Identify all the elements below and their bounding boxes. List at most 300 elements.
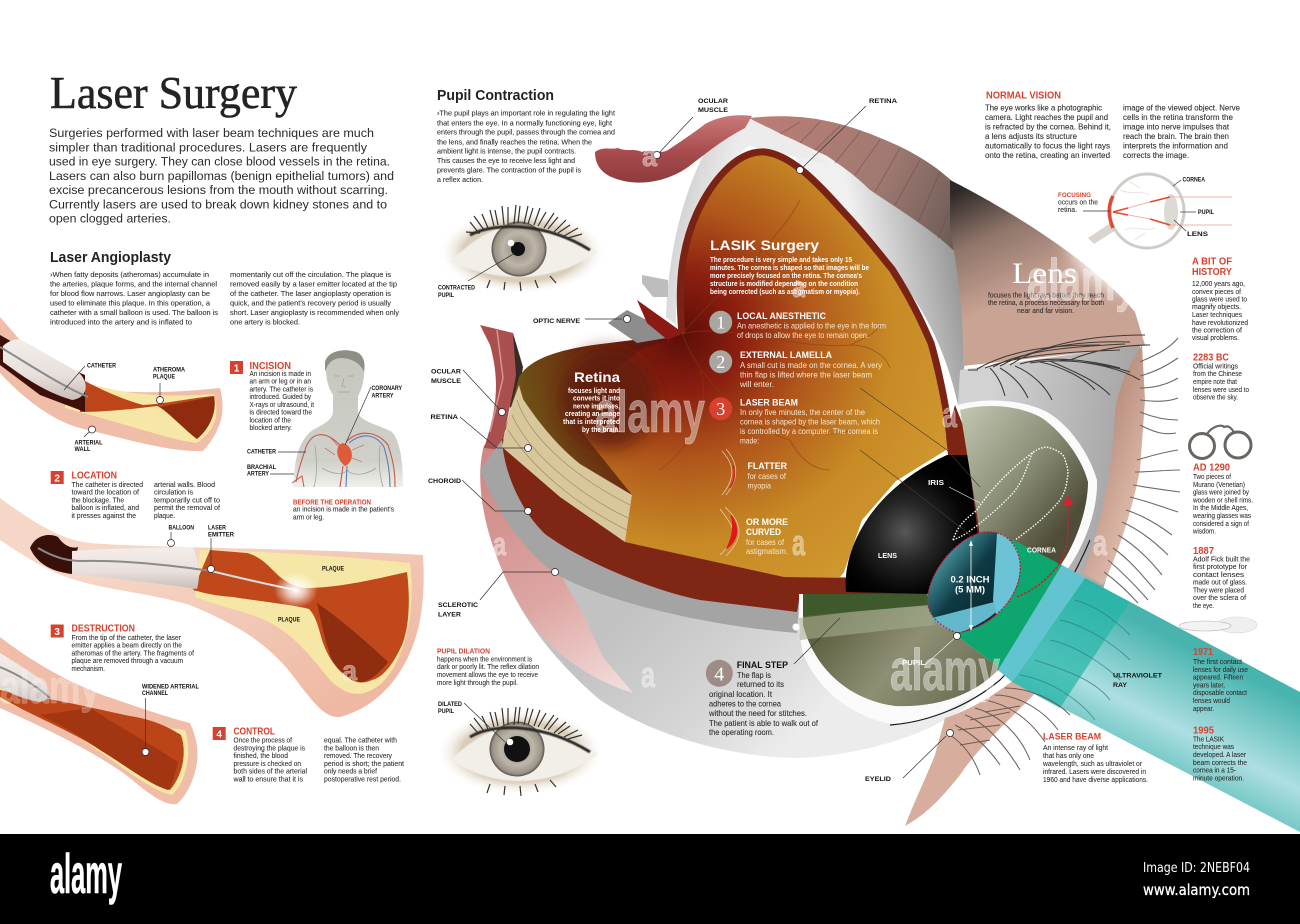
eye: upper grey shell (770, 119, 965, 405)
intro paragraph: Lasers can also burn papillomas (benign epithelial tumors) and (49, 169, 394, 183)
entry: 1995 (1193, 726, 1247, 782)
text: LASIK surgery: more precisely focused on the retina. The cornea's (710, 271, 862, 280)
stock-photo watermarks: a (792, 522, 806, 563)
eye: retina floor (505, 334, 860, 577)
labels around main eye: IRIS (928, 480, 944, 487)
label: dilated pupil: PUPIL (438, 708, 454, 715)
labels around main eye: RETINA (869, 98, 897, 105)
entry: 1995: 1995 (1193, 726, 1214, 736)
text: retina: focuses light and (568, 388, 620, 395)
text: pupil contraction: the lens, and finally reaches the retina. When the (437, 137, 592, 146)
step 1: incision: 1 (234, 364, 240, 374)
stock-photo watermarks: a (792, 271, 805, 304)
entry: 2283 BC (1193, 352, 1249, 402)
text: lens: the retina, a process necessary for both (988, 298, 1104, 307)
stock-photo watermarks: alamy (595, 380, 705, 445)
entry: 1995: technique was (1193, 742, 1234, 751)
text: normal vision: The eye works like a photographic (985, 104, 1102, 112)
footer image id: Image ID: 2NEBF04 (1143, 860, 1250, 876)
intro paragraph: excise precancerous lesions from the mouth without scarring. (49, 183, 388, 197)
entry: 1887: contact lenses (1193, 570, 1244, 579)
text: laser beam definition (1042, 731, 1148, 784)
entry: 1995: The LASIK (1193, 734, 1224, 744)
text: pupil dilation: more light through the pupil. (437, 678, 518, 687)
text: LASIK surgery: LASIK Surgery (710, 237, 819, 253)
label: dilated pupil (438, 701, 505, 742)
text: LASIK surgery (710, 237, 869, 296)
text: pupil contraction: a reflex action. (437, 175, 483, 184)
step 4: control: CONTROL (234, 726, 275, 737)
text: retina: nerve impulses, (573, 403, 620, 410)
step 3: destruction: plaque are removed through a vacuum (72, 656, 183, 665)
text: pupil dilation: PUPIL DILATION (437, 648, 490, 656)
step 3: laser beam (709, 397, 880, 445)
step 3: destruction: emitter applies a beam directly on the (72, 641, 182, 650)
footer bar: alamy (50, 842, 122, 905)
eye: iris disc and cornea ring (799, 401, 1097, 724)
entry: 1887: over the sclera of (1193, 593, 1247, 602)
step 2: location: plaque. (154, 511, 175, 520)
entry: intro: HISTORY (1192, 267, 1232, 278)
text: pupil contraction (437, 88, 616, 184)
eye: gold retina wall (580, 152, 951, 577)
entry: 1971: years later, (1193, 680, 1225, 689)
eye: lens (846, 455, 978, 594)
text: laser beam definition: infrared. Lasers were discovered in (1043, 767, 1146, 776)
text: angioplasty description: quick, and the patient's recovery period is usually (230, 298, 391, 308)
entry: 1971: lenses for daily use (1193, 665, 1248, 674)
timeline: a bit of history (1179, 256, 1257, 782)
entry: intro: Laser techniques (1192, 310, 1242, 319)
step 4: control: removed. The recovery (324, 751, 392, 760)
label: cornea: CORNEA (1182, 176, 1205, 183)
label: catheter: CATHETER (87, 362, 116, 370)
eye: retina inner rim (680, 152, 951, 447)
entry: 2283 BC: from the Chinese (1193, 369, 1242, 378)
label: arterial wall (74, 426, 102, 453)
step 3: destruction: DESTRUCTION (72, 624, 135, 635)
text: or more curved: astigmatism. (746, 546, 788, 556)
artery illustration 2: laser emitter on plaque (0, 498, 424, 717)
step 4: control: only needs a brief (324, 767, 378, 776)
entry: 1887 (1193, 546, 1250, 610)
label: arterial wall: WALL (74, 446, 90, 453)
step 1: local anesthetic: 1 (716, 312, 725, 332)
eye: pupil cornea section (927, 532, 1020, 633)
step 2: location: permit the removal of (154, 503, 221, 512)
entry: intro: magnify objects. (1192, 302, 1241, 311)
eye: green cornea zone (957, 540, 1062, 668)
text: angioplasty description: momentarily cut off the circulation. The plaque is (230, 270, 391, 279)
labels around main eye: SCLEROTIC (438, 602, 478, 609)
eye: tan retina layer (502, 385, 632, 542)
text: pupil contraction: prevents glare. The contraction of the pupil is (437, 166, 581, 175)
label: focusing: retina. (1058, 205, 1077, 214)
step 4: control: both sides of the arterial (234, 767, 307, 776)
eye: upper lid lashes (968, 335, 1150, 400)
stock-photo watermarks: alamy (0, 661, 100, 713)
label: laser emitter: EMITTER (208, 531, 234, 538)
step 3: laser beam: In only five minutes, the center of the (740, 407, 865, 417)
labels around main eye: PUPIL (902, 660, 926, 667)
labels for torso: ARTERY (372, 392, 394, 399)
step 4: control: 4 (216, 730, 222, 740)
step 4: final step: FINAL STEP (737, 660, 789, 671)
entry: 1971 (1193, 647, 1248, 713)
labels for torso: BRACHIAL (247, 464, 276, 471)
eye: upper muscle band (749, 116, 1005, 250)
entry: intro: convex pieces of (1192, 287, 1242, 296)
eye: lower ocular muscle fade (480, 445, 633, 693)
eye: iris band (946, 405, 980, 565)
step 2: location: it presses against the (72, 511, 136, 520)
footer url: www.alamy.com (1143, 881, 1250, 899)
text: pupil contraction: This causes the eye to receive less light and (437, 156, 575, 165)
entry: 2283 BC: empire note that (1193, 377, 1238, 386)
text: flatter (748, 461, 787, 490)
intro paragraph: Currently lasers are used to break down kidney stones and to (49, 197, 387, 211)
step 4: control: destroying the plaque is (234, 743, 305, 752)
entry: 2283 BC: 2283 BC (1193, 352, 1229, 364)
eye: lower sphere (490, 480, 1000, 758)
step 2: location: 2 (54, 474, 60, 484)
text: laser beam definition: 1960 and have diverse applications. (1043, 775, 1148, 784)
entry: AD 1290: glass were joined by (1193, 488, 1249, 496)
text: angioplasty description: ›When fatty deposits (atheromas) accumulate in (50, 270, 209, 279)
labels around main eye: OPTIC NERVE (533, 318, 581, 325)
step 3: laser beam: made: (740, 435, 759, 445)
text: lens (988, 257, 1104, 315)
step 3: destruction (51, 624, 195, 673)
labels for torso: CATHETER (247, 449, 276, 456)
heading: Laser Angioplasty: Laser Angioplasty (50, 250, 171, 266)
label: atheroma plaque (153, 366, 185, 404)
text: pupil contraction: Pupil Contraction (437, 88, 554, 104)
step 3: destruction: atheromas of the artery. The fragments of (72, 648, 195, 658)
step 1: incision (230, 361, 315, 432)
text: angioplasty description: used to eliminate this plaque. In this operation, a (50, 298, 211, 308)
intro paragraph: simpler than traditional procedures. Lasers are frequently (49, 140, 368, 154)
step 4: control: equal. The catheter with (324, 736, 397, 744)
labels around main eye: RETINA (430, 414, 458, 421)
entry: 1971: appear. (1193, 704, 1214, 713)
step 1: incision: artery. The catheter is (250, 384, 313, 393)
text: flatter: for cases of (748, 471, 787, 481)
label: arterial wall: ARTERIAL (74, 439, 102, 446)
entry: AD 1290: AD 1290 (1193, 462, 1230, 474)
step 2: location: temporarily cut off to (154, 495, 220, 504)
labels for torso: ARTERY (247, 471, 269, 478)
step 2: external lamella: A small cut is made on the cornea. A very (740, 360, 883, 370)
text: lens: Lens (1012, 257, 1077, 290)
artery illustration 3: widened channel (0, 637, 199, 804)
text: normal vision: NORMAL VISION (986, 90, 1061, 101)
step 4: control: wall to ensure that it is (233, 775, 303, 784)
step 3: destruction: From the tip of the catheter, the laser (72, 633, 181, 642)
step 1: local anesthetic: LOCAL ANESTHETIC (737, 311, 826, 322)
entry: 2283 BC: observe the sky. (1193, 392, 1238, 402)
eye: beam lashes (1020, 600, 1130, 720)
stock-photo watermarks (0, 140, 1137, 713)
label: contracted pupil (438, 253, 515, 299)
text: retina: by the brain. (582, 427, 620, 434)
eye: retinal vessels (660, 200, 890, 470)
entry: 1995: developed. A laser (1193, 750, 1246, 759)
entry: 1995: minute operation. (1193, 773, 1244, 782)
text: normal vision: is refracted by the cornea. Behind it, (985, 122, 1111, 132)
text: angioplasty description: introduced into the artery and is inflated to (50, 318, 192, 327)
step 4: final step: without the need for stitches. (708, 709, 807, 718)
entry: intro (1192, 256, 1248, 342)
eye: dark shading over retina floor (560, 350, 656, 450)
entry: 1887: the eye. (1193, 601, 1214, 610)
text: normal vision: automatically to focus the light rays (985, 142, 1110, 150)
step 3: destruction: mechanism. (72, 664, 105, 673)
step 2: external lamella: will enter. (739, 379, 774, 389)
labels around main eye: EYELID (865, 776, 891, 783)
text: normal vision: interprets the information and (1123, 142, 1228, 150)
text: lens: focuses the light rays before they reach (988, 290, 1104, 300)
text: angioplasty description: of the catheter. The laser angioplasty operation is (230, 289, 391, 298)
step 4: final step: original location. It (709, 690, 773, 699)
icon: antique spectacles (1190, 426, 1251, 458)
step 3: laser beam: is controlled by a computer. The cornea is (740, 426, 878, 436)
entry: AD 1290: Two pieces of (1193, 472, 1232, 481)
main eye cross-section illustration (480, 115, 1300, 832)
entry: 1887: They were placed (1193, 585, 1244, 594)
text: or more curved: CURVED (746, 527, 781, 538)
step 2: external lamella: EXTERNAL LAMELLA (740, 350, 832, 361)
text: normal vision: a lens adjusts its structure (985, 132, 1077, 141)
entry: AD 1290: Murano (Venetian) (1193, 480, 1245, 489)
text: normal vision (985, 90, 1240, 160)
entry: 1887: 1887 (1193, 546, 1214, 557)
step 4: final step: adheres to the cornea (709, 699, 782, 708)
eye: choroid band (502, 438, 930, 612)
step 1: incision: An incision is made in (250, 369, 311, 378)
eye: lower lid lashes (950, 688, 1070, 775)
label: plaque lower: PLAQUE (278, 616, 300, 624)
step 2: location: circulation is (154, 488, 193, 496)
step 4: control: postoperative rest period. (324, 775, 401, 784)
step 1: incision: blocked artery. (250, 423, 292, 432)
eye: red laser arc arrow (1017, 495, 1073, 597)
intro paragraph: used in eye surgery. They can close blood vessels in the retina. (49, 155, 390, 169)
step 1: local anesthetic: of drops to allow the eye to remain open. (737, 330, 869, 340)
step 4: final step: The patient is able to walk out of (709, 719, 819, 728)
label: widened arterial channel: CHANNEL (142, 690, 168, 697)
entry: AD 1290 (1192, 462, 1253, 535)
text: angioplasty description: removed easily by a laser emitter located at the tip (230, 280, 397, 288)
eye: grey sclera band (480, 440, 800, 633)
label: atheroma plaque: PLAQUE (153, 374, 175, 380)
title: Laser Surgery (50, 68, 297, 118)
label: pupil (1180, 209, 1214, 216)
label: focusing: occurs on the (1058, 197, 1098, 206)
labels around main eye: CORNEA (1027, 548, 1056, 554)
text: laser beam definition: An intense ray of light (1043, 743, 1109, 752)
eye: upper brown surface (950, 180, 1145, 366)
icon: flatter cornea (722, 449, 736, 495)
note: before the operation (293, 499, 394, 522)
step 2: location: toward the location of (72, 488, 140, 496)
text: angioplasty description (50, 270, 399, 327)
entry: intro: 12,000 years ago, (1192, 279, 1245, 288)
text: normal vision: corrects the image. (1123, 151, 1189, 160)
labels around main eye: 0.2 INCH (950, 574, 990, 586)
label: plaque upper: PLAQUE (322, 565, 344, 572)
label: lens: LENS (1187, 231, 1209, 238)
step 3: destruction: 3 (54, 627, 60, 638)
text: LASIK surgery: The procedure is very simple and takes only 15 (710, 255, 853, 264)
label: widened arterial channel (142, 684, 199, 756)
entry: AD 1290: wisdom. (1192, 526, 1216, 535)
step 3: laser beam: LASER BEAM (740, 397, 798, 408)
text: LASIK surgery: being corrected (such as astigmatism or myopia). (710, 287, 860, 296)
text: pupil dilation: dark or poorly lit. The reflex dilation (437, 662, 539, 671)
entry: 2283 BC: lenses were used to (1193, 385, 1249, 394)
step 4: final step: The flap is (737, 671, 771, 680)
step 4: control (213, 726, 405, 784)
label: laser emitter (208, 524, 234, 572)
artery illustration 1: plaque and catheter (0, 317, 223, 453)
step 3: laser beam: cornea is shaped by the laser beam, which (740, 416, 880, 426)
label: pupil: PUPIL (1198, 209, 1214, 216)
label: widened arterial channel: WIDENED ARTERIAL (142, 684, 199, 690)
entry: 1971: appeared. Fifteen (1193, 672, 1243, 682)
intro paragraph (49, 126, 394, 226)
step 2: external lamella: 2 (716, 352, 725, 372)
stock-photo watermarks: a (493, 526, 506, 562)
step 2: external lamella (709, 350, 883, 389)
step 1: local anesthetic (709, 311, 886, 340)
entry: 1995: cornea in a 15- (1193, 766, 1236, 774)
entry: intro: glass were used to (1192, 294, 1247, 304)
entry: intro: have revolutionized (1192, 318, 1248, 327)
eye: right grey sclera (958, 345, 1140, 590)
entry: AD 1290: In the Middle Ages, (1193, 503, 1248, 512)
entry: 1971: lenses would (1193, 696, 1230, 705)
label: atheroma plaque: ATHEROMA (153, 366, 185, 374)
icon: contact lenses (1179, 617, 1257, 633)
label: focusing (1058, 192, 1110, 214)
step 4: final step: 4 (714, 664, 724, 686)
entry: 1887: first prototype for (1193, 562, 1247, 571)
label: balloon: BALLOON (168, 524, 194, 532)
text: retina: Retina (574, 369, 620, 385)
text: laser beam definition: that has only one (1043, 751, 1094, 760)
step 2: location (51, 470, 221, 520)
text: normal vision: cells in the retina transform the (1123, 113, 1233, 122)
entry: 1887: Adolf Fick built the (1193, 554, 1250, 564)
entry: intro: visual problems. (1192, 333, 1239, 342)
text: normal vision: image into nerve impulses that (1123, 122, 1230, 132)
text: pupil contraction: enters through the pupil, passes through the cornea and (437, 128, 615, 137)
step 1: local anesthetic: An anesthetic is applied to the eye in the form (737, 320, 886, 330)
entry: 1971: The first contact (1193, 657, 1243, 666)
entry: intro: the correction of (1192, 325, 1243, 334)
step 1: incision: X-rays or ultrasound, it (250, 400, 315, 409)
text: retina: creating an image (565, 411, 620, 418)
label: lens (1174, 220, 1209, 238)
text: angioplasty description: catheter with a small balloon is used. The balloon is (50, 308, 218, 317)
entry: AD 1290: wearing glasses was (1192, 511, 1251, 520)
text: pupil contraction: ambient light is intense, the pupil contracts. (437, 147, 576, 156)
text: or more curved: OR MORE (746, 517, 789, 528)
labels for torso (247, 385, 402, 478)
text: pupil dilation: movement allows the eye to receive (437, 670, 538, 679)
diagram: normal eye focusing (1058, 174, 1232, 248)
eye: right lashes (1104, 338, 1180, 603)
entry: AD 1290: wooden or shell rims. (1192, 495, 1253, 504)
illustration: human torso with arteries (292, 350, 403, 487)
entry: 1995: beam corrects the (1193, 758, 1247, 767)
labels around main eye: MUSCLE (698, 107, 729, 114)
stock-photo watermarks: a (641, 654, 656, 695)
text: angioplasty description: short. Laser angioplasty is recommended when only (230, 308, 399, 317)
text: or more curved (746, 517, 789, 556)
labels around main eye: OCULAR (698, 98, 728, 105)
stock-photo watermarks: a (342, 655, 357, 686)
stock-photo watermarks: a (1093, 522, 1108, 563)
text: normal vision: camera. Light reaches the pupil and (985, 113, 1108, 122)
step 2: location: balloon is inflated, and (72, 503, 139, 512)
text: pupil contraction: ›The pupil plays an important role in regulating the light (437, 109, 616, 118)
leader lines and markers on main eye (460, 106, 980, 778)
text: flatter: FLATTER (748, 461, 787, 472)
stock-photo watermarks: a (642, 140, 657, 173)
eye: top ocular muscle (595, 115, 752, 183)
step 1: incision: INCISION (250, 361, 291, 372)
note: before the operation: an incision is made in the patient's (293, 505, 394, 514)
labels around main eye (428, 98, 1162, 783)
text: laser beam definition: wavelength, such as ultraviolet or (1042, 759, 1142, 768)
footer bar (0, 834, 1300, 924)
text: angioplasty description: for blood flow narrows. Laser angioplasty can be (50, 289, 210, 298)
label: laser emitter: LASER (208, 524, 226, 532)
step 1: incision: introduced. Guided by (250, 392, 311, 401)
text: pupil dilation: happens when the environment is (437, 654, 532, 664)
text: retina: that is interpreted (563, 419, 620, 426)
text: pupil contraction: that enters the eye. In a normally functioning eye, light (437, 118, 613, 127)
entry: 1971: disposable contact (1193, 688, 1248, 697)
label: focusing: FOCUSING (1058, 192, 1091, 199)
illustration: contracted pupil eye (438, 205, 606, 299)
text: angioplasty description: the arteries, plaque forms, and the internal channel (50, 280, 217, 288)
text: LASIK surgery: minutes. The cornea is shaped so that images will be (710, 263, 869, 272)
text: LASIK surgery: structure is modified depending on the condition (710, 279, 858, 288)
labels around main eye: MUSCLE (431, 378, 462, 385)
entry: intro: A BIT OF (1192, 256, 1232, 268)
note: before the operation: BEFORE THE OPERATION (293, 499, 371, 506)
text: angioplasty description: one artery is blocked. (230, 318, 300, 327)
stock-photo watermarks: alamy (890, 638, 1000, 703)
step 4: control: pressure is checked on (234, 759, 301, 768)
text: retina: converts it into (573, 396, 620, 402)
text: normal vision: image of the viewed object. Nerve (1123, 104, 1240, 112)
intro paragraph: open clogged arteries. (49, 212, 171, 226)
step 2: location: The catheter is directed (72, 480, 143, 489)
entry: AD 1290: considered a sign of (1193, 519, 1250, 528)
labels around main eye: CHOROID (428, 478, 461, 485)
step 4: control: period is short; the patient (324, 759, 405, 768)
step 4: control: the balloon is then (324, 743, 379, 752)
stock-photo watermarks: alamy (1027, 248, 1137, 313)
labels around main eye: ULTRAVIOLET (1113, 672, 1162, 680)
labels for torso: CORONARY (372, 385, 402, 392)
step 4: final step: returned to its (737, 680, 784, 689)
labels around main eye: (5 MM) (955, 584, 985, 596)
